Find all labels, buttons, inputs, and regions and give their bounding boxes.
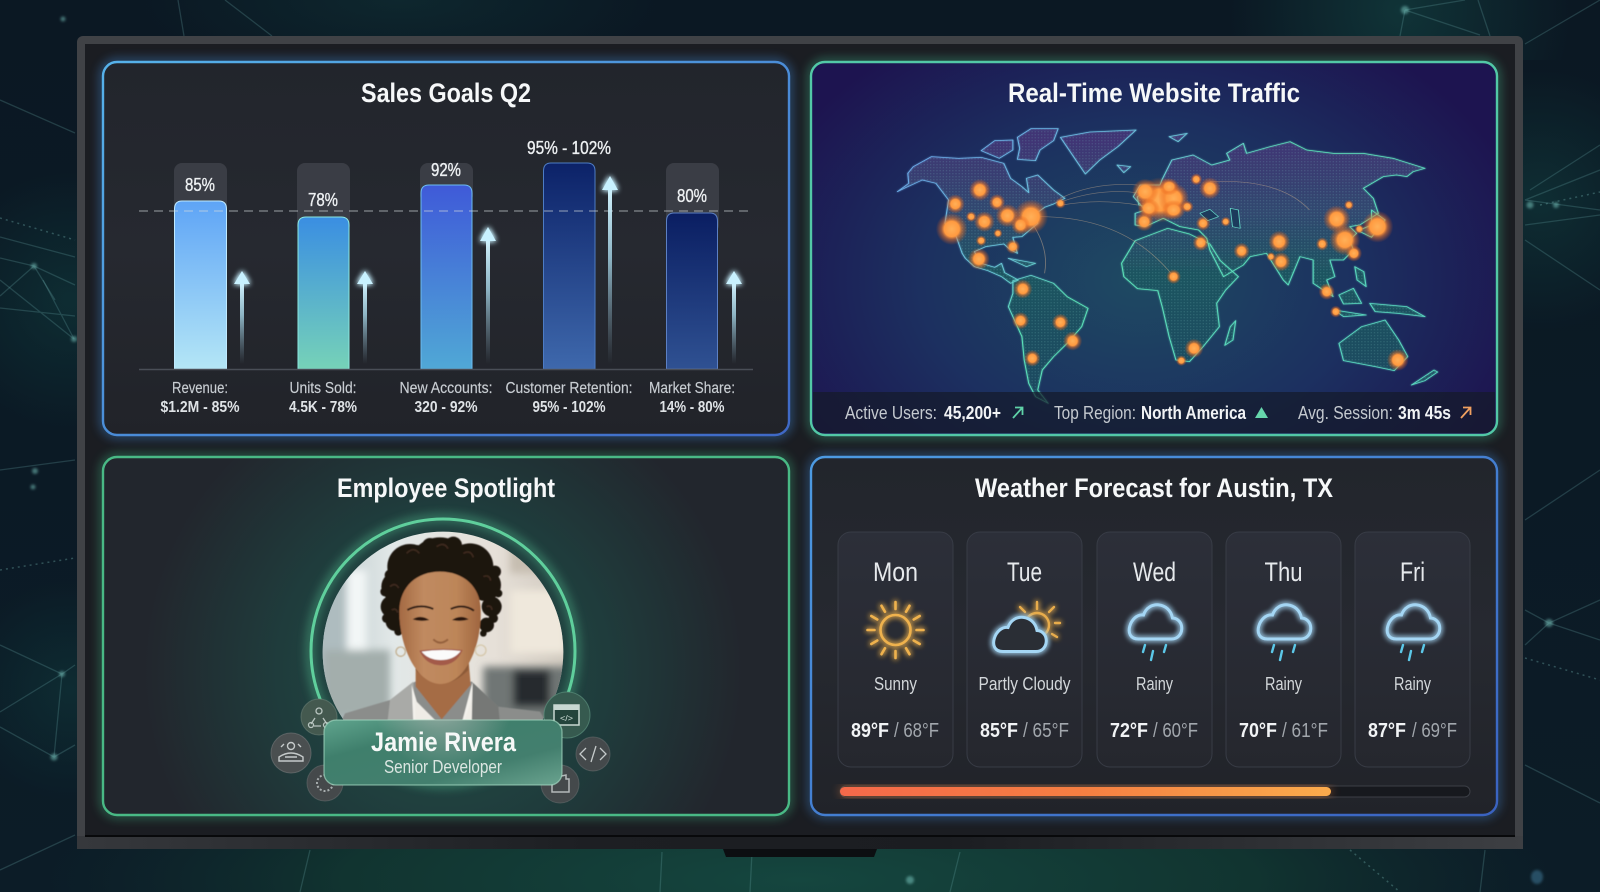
forecast card: thursday: 70°F — [1239, 720, 1277, 742]
bar values — [185, 138, 707, 210]
icon: chip — [307, 765, 343, 801]
forecast card: friday: / 69°F — [1412, 720, 1457, 742]
hair — [380, 537, 502, 637]
forecast card: monday — [838, 532, 953, 767]
arrow: revenue — [234, 271, 250, 364]
ring stroke — [311, 519, 575, 783]
forecast card: monday: / 68°F — [894, 720, 939, 742]
bar labels: 14% - 80% — [660, 399, 724, 416]
forecast card: monday: 89°F — [851, 720, 889, 742]
icon: team tree — [301, 699, 337, 735]
progress bar — [840, 786, 1470, 797]
icon: code brackets — [576, 737, 610, 771]
bar labels: Customer Retention: — [506, 380, 632, 397]
bar values: 78% — [308, 190, 338, 210]
jacket — [340, 682, 547, 723]
icon: rain cloud — [1258, 605, 1311, 660]
icon: folder — [541, 765, 579, 803]
forecast card: thursday: Thu — [1264, 557, 1302, 587]
icon: code window: </> — [560, 714, 573, 723]
shirt — [412, 682, 473, 723]
forecast card: tuesday: Partly Cloudy — [978, 674, 1070, 694]
neck — [416, 657, 471, 719]
panel: employee spotlight — [103, 457, 789, 815]
heading: traffic: Real-Time Website Traffic — [1008, 78, 1300, 108]
icon: up arrow green — [1013, 408, 1022, 418]
eyes — [413, 617, 469, 621]
forecast card: wednesday: 72°F — [1110, 720, 1148, 742]
forecast card: tuesday — [967, 532, 1082, 767]
forecast card: wednesday: Rainy — [1136, 674, 1173, 694]
inland seas — [1200, 208, 1240, 228]
brows — [407, 606, 474, 611]
arrow: market share — [726, 271, 742, 364]
forecast card: monday: Sunny — [874, 674, 917, 694]
icon: group — [271, 733, 311, 773]
stats strip: Active Users: — [845, 403, 937, 423]
bar labels: 320 - 92% — [414, 399, 478, 416]
icon: rain cloud — [1387, 605, 1440, 660]
forecast card: monday: Mon — [873, 557, 918, 587]
nose — [433, 639, 448, 643]
forecast card: wednesday: Wed — [1133, 557, 1176, 587]
smile — [419, 649, 463, 665]
skill icons — [271, 692, 610, 803]
icon: up arrow orange — [1461, 408, 1470, 418]
forecast card: thursday — [1226, 532, 1341, 767]
bar: market share — [666, 213, 718, 369]
forecast card: tuesday: / 65°F — [1023, 720, 1069, 742]
bar labels: 4.5K - 78% — [289, 399, 357, 416]
forecast card: thursday: / 61°F — [1282, 720, 1328, 742]
world map — [897, 129, 1438, 403]
icon: partly cloudy — [994, 602, 1060, 652]
bar: new accounts — [421, 185, 472, 369]
bar: units sold — [298, 217, 349, 369]
panel: website traffic — [811, 62, 1497, 435]
bar labels: 95% - 102% — [532, 399, 606, 416]
heading: spotlight: Employee Spotlight — [337, 473, 555, 503]
heading: weather: Weather Forecast for Austin, TX — [975, 473, 1333, 503]
bar values: 92% — [431, 160, 461, 180]
name plate: Senior Developer — [384, 757, 502, 777]
arrow: units sold — [357, 271, 373, 364]
forecast card: friday — [1355, 532, 1470, 767]
name plate — [324, 720, 562, 785]
name plate: Jamie Rivera — [371, 727, 517, 757]
stats strip — [813, 392, 1495, 433]
stats strip: 45,200+ — [944, 403, 1001, 423]
bar labels: New Accounts: — [400, 380, 492, 397]
bar: customer retention — [544, 163, 595, 369]
portrait photo — [322, 532, 564, 720]
stats strip: 3m 45s — [1398, 403, 1451, 423]
stats strip: Avg. Session: — [1298, 403, 1393, 423]
forecast card: tuesday: Tue — [1007, 557, 1042, 587]
heading: sales goals: Sales Goals Q2 — [361, 78, 531, 108]
bar labels: Market Share: — [649, 380, 735, 397]
panel: weather forecast — [811, 457, 1497, 815]
icon: sun — [868, 602, 924, 658]
traffic hotspots — [936, 173, 1409, 371]
arrow: customer retention — [602, 176, 618, 364]
bar labels: Units Sold: — [290, 380, 356, 397]
forecast card: friday: 87°F — [1368, 720, 1406, 742]
icon: code window — [544, 692, 590, 738]
monitor stand — [723, 849, 877, 857]
traffic arcs — [1033, 181, 1310, 277]
portrait ring — [310, 518, 576, 784]
panel: sales goals — [103, 62, 789, 435]
forecast card: friday: Rainy — [1394, 674, 1431, 694]
bar: revenue — [174, 201, 226, 369]
bar values: 85% — [185, 175, 215, 195]
forecast card: tuesday: 85°F — [980, 720, 1018, 742]
icon: rain cloud — [1129, 605, 1182, 660]
icon: triangle — [1255, 407, 1268, 418]
bar labels — [160, 380, 735, 416]
bar labels: Revenue: — [172, 380, 228, 397]
bar chart — [139, 138, 753, 416]
arrow: new accounts — [480, 227, 496, 364]
forecast card: friday: Fri — [1400, 557, 1425, 587]
forecast card: wednesday: / 60°F — [1153, 720, 1198, 742]
earrings — [396, 647, 405, 656]
forecast card: thursday: Rainy — [1265, 674, 1302, 694]
forecast card: wednesday — [1097, 532, 1212, 767]
stats strip: Top Region: — [1054, 403, 1136, 423]
bar values: 95% - 102% — [527, 138, 611, 158]
stats strip: North America — [1141, 403, 1247, 423]
face — [399, 572, 481, 684]
bar values: 80% — [677, 186, 707, 206]
bar labels: $1.2M - 85% — [160, 399, 240, 416]
